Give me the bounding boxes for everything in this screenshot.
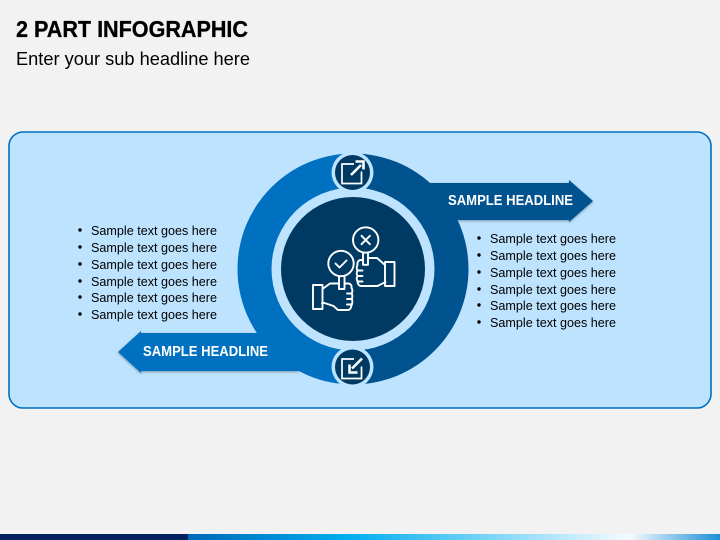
ring: outer circle — [238, 154, 469, 384]
text block: left bullets — [78, 224, 217, 322]
panel: background — [9, 132, 711, 408]
bottom small badge — [332, 346, 374, 388]
right headline text: SAMPLE HEADLINE — [448, 193, 573, 209]
left headline text: SAMPLE HEADLINE — [143, 344, 268, 360]
text block: right bullets: Sample text goes here — [490, 266, 616, 280]
text block: right bullets: Sample text goes here — [490, 232, 616, 246]
text block: right bullets: Sample text goes here — [490, 283, 616, 297]
text block: left bullets: Sample text goes here — [91, 291, 217, 305]
arrow: left headline — [118, 331, 300, 373]
text block: left bullets: Sample text goes here — [91, 258, 217, 272]
title: 2 PART INFOGRAPHIC — [16, 16, 248, 42]
text block: left bullets: Sample text goes here — [91, 224, 217, 238]
text block: left bullets: Sample text goes here — [91, 275, 217, 289]
ring: inner light circle — [272, 188, 434, 350]
centre dark circle — [281, 197, 425, 341]
top small badge — [332, 152, 374, 194]
icon: square with outward arrow — [342, 162, 364, 184]
text block: right bullets: Sample text goes here — [490, 316, 616, 330]
icon: hands holding check and cross signs — [313, 227, 394, 310]
text block: right bullets — [477, 232, 616, 330]
text block: left bullets: Sample text goes here — [91, 308, 217, 322]
footer bar — [0, 534, 720, 540]
text block: right bullets: Sample text goes here — [490, 299, 616, 313]
subtitle: Enter your sub headline here — [16, 49, 250, 69]
arrow: right headline — [420, 180, 593, 222]
text block: left bullets: Sample text goes here — [91, 241, 217, 255]
icon: square with inward arrow — [342, 358, 362, 378]
text block: right bullets: Sample text goes here — [490, 249, 616, 263]
